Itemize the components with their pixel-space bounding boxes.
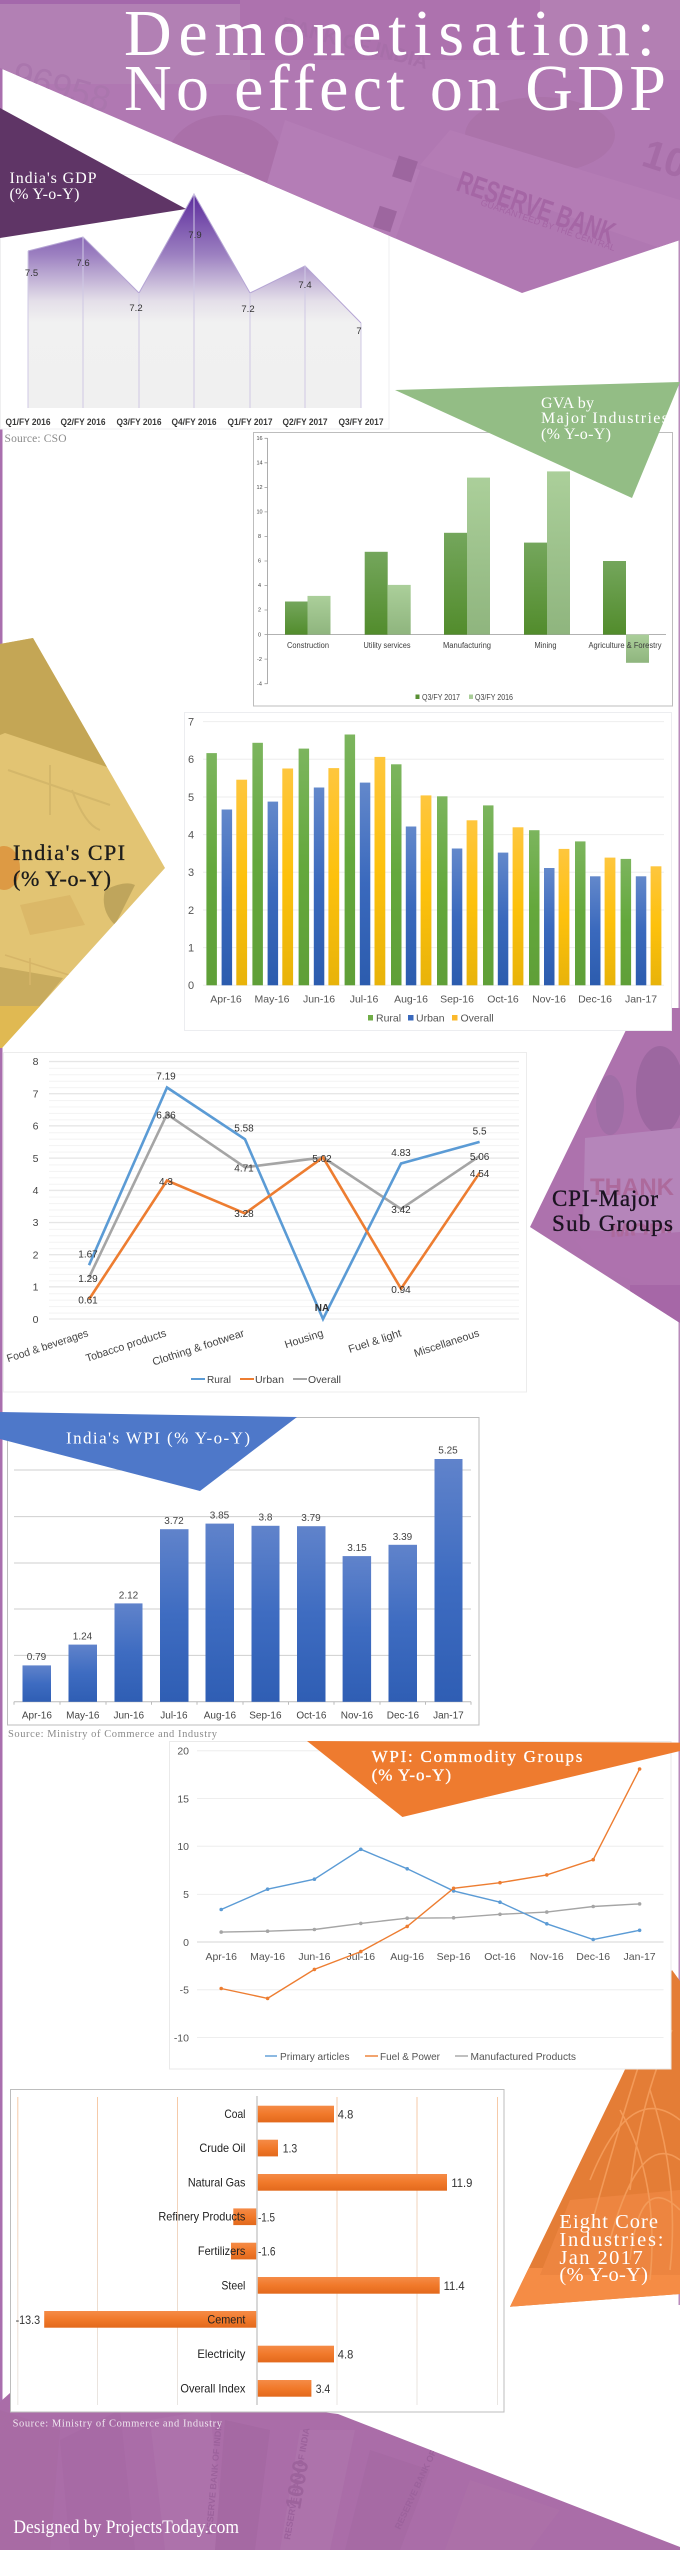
sub group value labels: 0.94 bbox=[391, 1285, 411, 1296]
WPI commodity heading triangle bbox=[307, 1741, 680, 1817]
commodity axis labels bbox=[205, 1951, 656, 1963]
commodity axis labels: Jun-16 bbox=[298, 1951, 331, 1963]
commodity axis labels: Sep-16 bbox=[437, 1951, 471, 1963]
top banner background: GUARANTEED BY THE CENTRAL bbox=[479, 197, 617, 253]
CPI axis labels: Oct-16 bbox=[487, 994, 519, 1006]
GDP value labels: 7.5 bbox=[25, 268, 38, 279]
GVA y labels: 0 bbox=[258, 632, 261, 638]
GVA y labels: -4 bbox=[257, 681, 262, 687]
WPI value labels: 3.72 bbox=[164, 1516, 184, 1527]
commodity y labels bbox=[174, 1746, 189, 2044]
core value labels: 4.8 bbox=[338, 2348, 354, 2362]
sub group y labels: 7 bbox=[33, 1088, 39, 1100]
title bbox=[124, 0, 666, 125]
Eight core heading text bbox=[559, 2211, 663, 2286]
WPI axis labels: Aug-16 bbox=[204, 1710, 236, 1722]
title: No effect on GDP bbox=[124, 52, 666, 125]
GVA y labels: 8 bbox=[258, 534, 261, 540]
sub group y labels: 3 bbox=[33, 1217, 39, 1229]
GDP axis labels: Q3/FY 2017 bbox=[338, 417, 384, 428]
GDP value labels: 7.9 bbox=[188, 230, 202, 241]
WPI axis labels: Nov-16 bbox=[341, 1710, 373, 1722]
CPI axis labels: May-16 bbox=[254, 994, 290, 1006]
GVA category labels: Mining bbox=[534, 641, 556, 650]
WPI axis labels bbox=[22, 1710, 464, 1722]
bottom banner background bbox=[0, 2393, 680, 2550]
CPI legend: Overall bbox=[460, 1012, 494, 1024]
WPI bars bbox=[22, 1459, 462, 1702]
CPI axis labels: Dec-16 bbox=[578, 994, 612, 1006]
CPI y labels: 6 bbox=[188, 754, 194, 766]
GVA axes bbox=[264, 438, 666, 684]
GVA heading text: (% Y-o-Y) bbox=[541, 426, 611, 443]
CPI-major heading polygon background: MODI bbox=[610, 1219, 673, 1246]
GVA y labels: 10 bbox=[256, 510, 263, 516]
core value labels: -1.6 bbox=[258, 2244, 276, 2258]
GVA category labels: Agriculture & Forestry bbox=[588, 641, 662, 650]
CPI-major heading polygon background bbox=[530, 1008, 680, 1323]
GDP value labels: 7.2 bbox=[129, 303, 143, 314]
GDP heading text: (% Y-o-Y) bbox=[10, 186, 80, 203]
commodity axis labels: Dec-16 bbox=[576, 1951, 610, 1963]
CPI y labels bbox=[188, 716, 194, 992]
sub group value labels: 3.42 bbox=[391, 1205, 411, 1216]
top banner background bbox=[0, 0, 680, 293]
GDP outline bbox=[28, 194, 361, 323]
core category labels: Electricity bbox=[197, 2347, 245, 2361]
GVA y labels: 4 bbox=[258, 583, 261, 589]
bottom banner background: RESERVE BANK OF INDIA bbox=[393, 2423, 450, 2531]
CPI rural bars bbox=[206, 734, 631, 985]
GDP axis labels: Q1/FY 2016 bbox=[6, 417, 50, 428]
commodity axis labels: Jan-17 bbox=[624, 1951, 656, 1963]
sub group value labels: 4.71 bbox=[234, 1164, 254, 1174]
CPI gridlines bbox=[203, 722, 664, 985]
commodity gridlines bbox=[197, 1751, 664, 2038]
CPI axis labels: Aug-16 bbox=[394, 994, 428, 1006]
sub group value labels: 1.29 bbox=[78, 1274, 98, 1285]
sub group y labels: 2 bbox=[33, 1250, 39, 1262]
CPI heading text: (% Y-o-Y) bbox=[13, 866, 111, 891]
GDP axis labels: Q1/FY 2017 bbox=[228, 417, 272, 428]
sub group y labels: 0 bbox=[33, 1314, 39, 1326]
GVA category labels bbox=[287, 641, 662, 650]
top banner background: BANK OF INDIA bbox=[279, 14, 430, 74]
core value labels: -1.5 bbox=[258, 2210, 275, 2224]
Eight core heading polygon background bbox=[500, 1960, 680, 2313]
GDP axis labels bbox=[6, 417, 384, 428]
core category labels: Natural Gas bbox=[188, 2176, 245, 2190]
GDP value labels bbox=[25, 230, 362, 337]
sub group value labels: NA bbox=[315, 1303, 329, 1314]
WPI value labels: 3.39 bbox=[393, 1532, 413, 1543]
core axis bbox=[256, 2096, 258, 2405]
WPI value labels: 5.25 bbox=[438, 1446, 458, 1456]
core category labels: Coal bbox=[224, 2107, 245, 2121]
GVA category labels: Manufacturing bbox=[443, 641, 491, 650]
bottom banner background: 1000 bbox=[280, 2458, 313, 2511]
sub group y labels: 1 bbox=[33, 1282, 39, 1294]
CPI y labels: 4 bbox=[188, 830, 194, 842]
core category labels: Cement bbox=[207, 2312, 246, 2326]
commodity y labels: 0 bbox=[183, 1937, 189, 1949]
sub group axis labels: Food & beverages bbox=[5, 1327, 90, 1365]
sub group axis labels: Clothing & footwear bbox=[151, 1327, 246, 1369]
CPI legend: Urban bbox=[416, 1012, 445, 1024]
Eight core heading text: Eight Core bbox=[559, 2211, 658, 2233]
GVA bars bbox=[285, 471, 649, 663]
GDP value labels: 7.6 bbox=[76, 258, 90, 269]
core category labels: Crude Oil bbox=[199, 2141, 245, 2155]
GVA category labels: Utility services bbox=[364, 641, 410, 650]
sub group value labels: 7.19 bbox=[156, 1072, 176, 1082]
core value labels: 4.8 bbox=[338, 2108, 354, 2122]
GVA heading text: Major Industries bbox=[541, 410, 668, 427]
panel: GDP chart bbox=[0, 174, 389, 429]
GDP area chart bbox=[28, 194, 361, 408]
sub group legend bbox=[191, 1374, 341, 1386]
WPI source: Source: Ministry of Commerce and Industry bbox=[8, 1729, 218, 1740]
sub group value labels bbox=[78, 1072, 490, 1314]
sub group value labels: 5.06 bbox=[470, 1152, 490, 1163]
commodity zero axis bbox=[197, 1941, 664, 1943]
GVA y labels: 2 bbox=[258, 608, 261, 614]
WPI value labels: 0.79 bbox=[27, 1652, 47, 1663]
WPI axis labels: Jul-16 bbox=[160, 1710, 188, 1722]
core category labels: Steel bbox=[221, 2278, 245, 2292]
GVA heading triangle bbox=[395, 382, 680, 498]
WPI value labels: 3.15 bbox=[347, 1543, 367, 1554]
CPI-major heading text bbox=[552, 1186, 673, 1236]
WPI commodity heading text: WPI: Commodity Groups bbox=[372, 1747, 582, 1766]
WPI heading text: India's WPI (% Y-o-Y) bbox=[66, 1428, 250, 1448]
GVA y labels: 6 bbox=[258, 559, 261, 565]
source: CSO: Source: CSO bbox=[4, 433, 66, 445]
Eight core heading text: Jan 2017 bbox=[559, 2247, 643, 2269]
WPI value labels: 3.8 bbox=[259, 1512, 273, 1524]
sub group y labels bbox=[33, 1056, 39, 1326]
WPI axis labels: Oct-16 bbox=[296, 1710, 327, 1722]
commodity axis labels: May-16 bbox=[250, 1951, 285, 1963]
CPI-major heading text: Sub Groups bbox=[552, 1211, 673, 1236]
CPI y labels: 2 bbox=[188, 905, 194, 917]
CPI y labels: 0 bbox=[188, 980, 194, 992]
CPI y labels: 5 bbox=[188, 792, 194, 804]
sub group axis labels: Housing bbox=[283, 1327, 325, 1351]
sub group value labels: 3.28 bbox=[234, 1209, 254, 1220]
WPI commodity heading text: (% Y-o-Y) bbox=[372, 1766, 451, 1784]
core gridlines bbox=[17, 2097, 498, 2405]
CPI axis labels: Nov-16 bbox=[532, 994, 566, 1006]
WPI axis labels: Jan-17 bbox=[433, 1710, 464, 1722]
core value labels: 1.3 bbox=[283, 2142, 297, 2156]
WPI axis labels: Sep-16 bbox=[249, 1710, 282, 1722]
commodity y labels: 10 bbox=[177, 1841, 189, 1853]
CPI overall bars bbox=[236, 757, 661, 985]
line: primary articles bbox=[219, 1848, 641, 1941]
core category labels: Overall Index bbox=[180, 2382, 245, 2396]
WPI heading triangle bbox=[0, 1412, 297, 1491]
commodity y labels: -10 bbox=[174, 2032, 189, 2044]
core value labels: 11.9 bbox=[451, 2176, 473, 2190]
panel: CPI bar chart bbox=[184, 712, 672, 1030]
CPI urban bars bbox=[222, 783, 646, 985]
GVA category labels: Construction bbox=[287, 641, 329, 650]
CPI y labels: 7 bbox=[188, 716, 194, 728]
sub group y labels: 6 bbox=[33, 1120, 39, 1132]
CPI axis labels: Apr-16 bbox=[210, 994, 242, 1006]
sub group axis labels: Miscellaneous bbox=[413, 1327, 481, 1360]
GVA heading text bbox=[541, 395, 668, 443]
sub group y labels: 5 bbox=[33, 1153, 39, 1165]
sub group value labels: 5.58 bbox=[234, 1124, 254, 1134]
footer credit: Designed by ProjectsToday.com bbox=[13, 2517, 239, 2538]
core category labels bbox=[158, 2107, 246, 2396]
commodity axis labels: Nov-16 bbox=[530, 1951, 564, 1963]
WPI axis labels: Apr-16 bbox=[22, 1710, 52, 1722]
GVA y labels: -2 bbox=[257, 657, 262, 663]
CPI heading polygon bbox=[0, 630, 170, 1050]
sub group value labels: 5.5 bbox=[473, 1126, 487, 1138]
panel: GVA chart bbox=[254, 432, 672, 706]
panel: WPI bar chart bbox=[8, 1418, 479, 1725]
bottom banner background: RESERVE BANK OF INDIA bbox=[282, 2426, 312, 2540]
commodity y labels: 5 bbox=[183, 1889, 189, 1901]
sub group major gridlines bbox=[49, 1061, 519, 1319]
sub group axis labels: Fuel & light bbox=[347, 1327, 403, 1356]
CPI legend: Rural bbox=[376, 1012, 401, 1024]
sub group value labels: 4.83 bbox=[391, 1148, 411, 1159]
GDP heading text: India's GDP bbox=[10, 170, 97, 187]
WPI value labels: 3.79 bbox=[301, 1513, 321, 1524]
GDP heading text bbox=[10, 170, 97, 203]
commodity axis labels: Jul-16 bbox=[346, 1951, 375, 1963]
GVA y labels: 14 bbox=[256, 460, 263, 466]
bottom banner background: RESERVE BANK OF INDIA bbox=[204, 2421, 224, 2535]
sub group axis labels bbox=[5, 1327, 481, 1369]
GDP value labels: 7.2 bbox=[241, 304, 255, 315]
sub group value labels: 6.36 bbox=[156, 1110, 176, 1122]
GDP axis labels: Q4/FY 2016 bbox=[172, 417, 216, 428]
core bars bbox=[44, 2106, 447, 2397]
top banner background: 96958 bbox=[8, 53, 115, 120]
GVA legend bbox=[416, 693, 513, 702]
GVA y labels: 12 bbox=[256, 485, 263, 491]
CPI axis labels: Sep-16 bbox=[440, 994, 474, 1006]
commodity axis labels: Oct-16 bbox=[484, 1951, 516, 1963]
sub group minor gridlines bbox=[49, 1061, 519, 1319]
core source: Source: Ministry of Commerce and Industry bbox=[13, 2418, 223, 2430]
GDP value labels: 7 bbox=[356, 326, 362, 337]
CPI axis labels bbox=[210, 994, 657, 1006]
sub group value labels: 4.3 bbox=[159, 1177, 173, 1188]
commodity y labels: -5 bbox=[180, 1984, 189, 1996]
CPI-major heading text: CPI-Major bbox=[552, 1186, 658, 1211]
commodity legend bbox=[265, 2051, 576, 2063]
GDP axis labels: Q2/FY 2016 bbox=[60, 417, 106, 428]
panel: eight core industries bar chart bbox=[10, 2090, 504, 2412]
GVA y labels bbox=[256, 436, 263, 687]
GVA legend: Q3/FY 2017 bbox=[422, 693, 460, 702]
CPI legend bbox=[368, 1012, 494, 1024]
line: rural bbox=[89, 1088, 480, 1319]
GDP value labels: 7.4 bbox=[298, 280, 312, 291]
sub group value labels: 4.54 bbox=[470, 1169, 490, 1180]
GDP heading triangle bbox=[0, 108, 186, 238]
core value labels: -13.3 bbox=[16, 2313, 40, 2327]
commodity y labels: 20 bbox=[177, 1746, 189, 1758]
sub group y labels: 8 bbox=[33, 1056, 39, 1068]
CPI axis labels: Jul-16 bbox=[350, 994, 378, 1006]
GDP axis labels: Q3/FY 2016 bbox=[116, 417, 162, 428]
sub group legend: Rural bbox=[207, 1374, 231, 1386]
WPI commodity heading text bbox=[372, 1747, 582, 1784]
core value labels: 11.4 bbox=[444, 2279, 465, 2293]
WPI gridlines bbox=[14, 1470, 471, 1655]
GDP axis labels: Q2/FY 2017 bbox=[282, 417, 328, 428]
line: fuel and power bbox=[219, 1767, 641, 2000]
GVA y labels: 16 bbox=[256, 436, 263, 442]
core value labels bbox=[16, 2108, 473, 2396]
WPI axis bbox=[14, 1702, 471, 1705]
WPI axis labels: Jun-16 bbox=[114, 1710, 145, 1722]
core category labels: Fertilizers bbox=[198, 2244, 245, 2258]
panel: CPI sub groups line chart bbox=[4, 1052, 526, 1392]
commodity axis labels: Apr-16 bbox=[205, 1951, 237, 1963]
WPI value labels: 2.12 bbox=[119, 1590, 139, 1602]
line: urban bbox=[89, 1157, 480, 1299]
sub group y labels: 4 bbox=[33, 1185, 39, 1197]
Eight core heading text: Industries: bbox=[559, 2229, 663, 2251]
CPI axis labels: Jan-17 bbox=[625, 994, 657, 1006]
CPI heading text bbox=[13, 840, 125, 891]
commodity legend: Primary articles bbox=[280, 2051, 350, 2063]
CPI y labels: 3 bbox=[188, 867, 194, 879]
WPI value labels: 1.24 bbox=[73, 1632, 93, 1642]
commodity legend: Manufactured Products bbox=[470, 2051, 576, 2063]
sub group legend: Overall bbox=[308, 1374, 341, 1386]
CPI y labels: 1 bbox=[188, 942, 194, 954]
Eight core heading text: (% Y-o-Y) bbox=[559, 2264, 648, 2286]
panel: WPI commodity line chart bbox=[170, 1742, 671, 2069]
commodity legend: Fuel & Power bbox=[380, 2051, 440, 2063]
WPI axis labels: Dec-16 bbox=[387, 1710, 419, 1722]
WPI value labels bbox=[27, 1446, 458, 1663]
GVA heading text: GVA by bbox=[541, 395, 594, 412]
sub group value labels: 5.02 bbox=[312, 1154, 332, 1165]
core value labels: 3.4 bbox=[316, 2382, 330, 2396]
GVA legend: Q3/FY 2016 bbox=[475, 693, 513, 702]
sub group axis labels: Tobacco products bbox=[84, 1327, 168, 1365]
commodity y labels: 15 bbox=[177, 1794, 189, 1806]
sub group legend: Urban bbox=[255, 1374, 284, 1386]
commodity axis labels: Aug-16 bbox=[390, 1951, 424, 1963]
core category labels: Refinery Products bbox=[158, 2210, 245, 2224]
sub group value labels: 0.61 bbox=[78, 1296, 98, 1306]
CPI axis labels: Jun-16 bbox=[303, 994, 335, 1006]
WPI axis labels: May-16 bbox=[66, 1710, 100, 1722]
line: overall bbox=[89, 1114, 480, 1278]
GDP drop lines bbox=[28, 194, 361, 408]
WPI value labels: 3.85 bbox=[210, 1510, 230, 1522]
sub group value labels: 1.67 bbox=[78, 1250, 98, 1260]
CPI heading text: India's CPI bbox=[13, 840, 125, 865]
line: manufactured products bbox=[219, 1902, 641, 1934]
